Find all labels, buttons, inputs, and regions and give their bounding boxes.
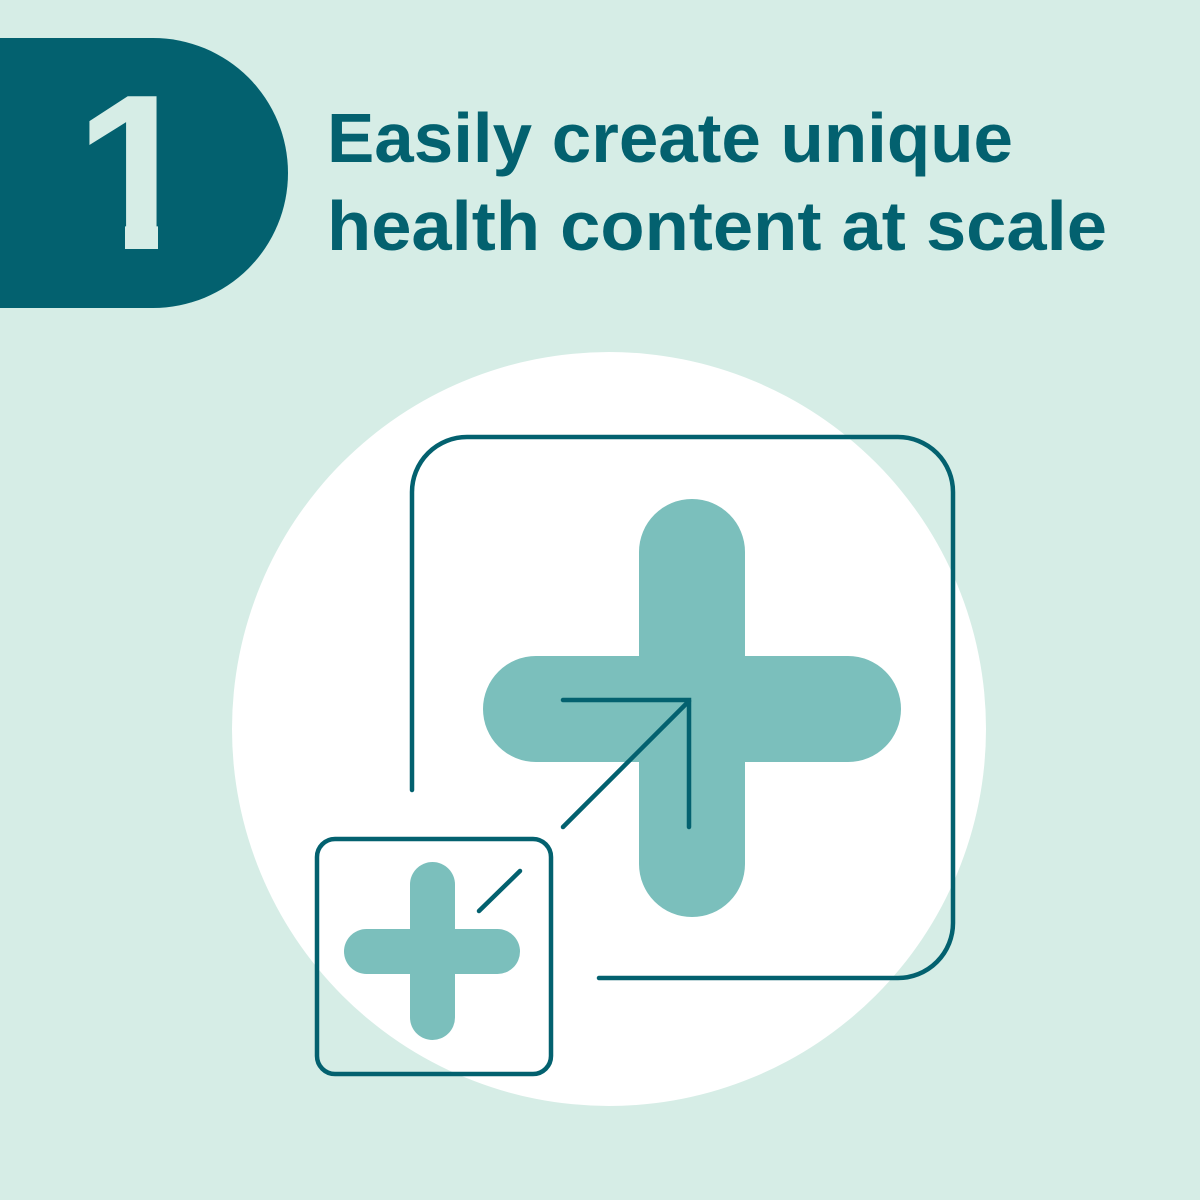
- small frame with small plus: [317, 839, 551, 1074]
- title: [327, 99, 1107, 265]
- badge: number 1: 1: [74, 49, 198, 297]
- white circle background: [232, 352, 986, 1106]
- title: Easily create unique: [327, 99, 1013, 177]
- title: health content at scale: [327, 187, 1107, 265]
- arrow: scale up: [563, 700, 689, 827]
- icon: large plus: [483, 499, 901, 917]
- badge: number 1: [0, 38, 288, 308]
- large frame: [412, 437, 953, 978]
